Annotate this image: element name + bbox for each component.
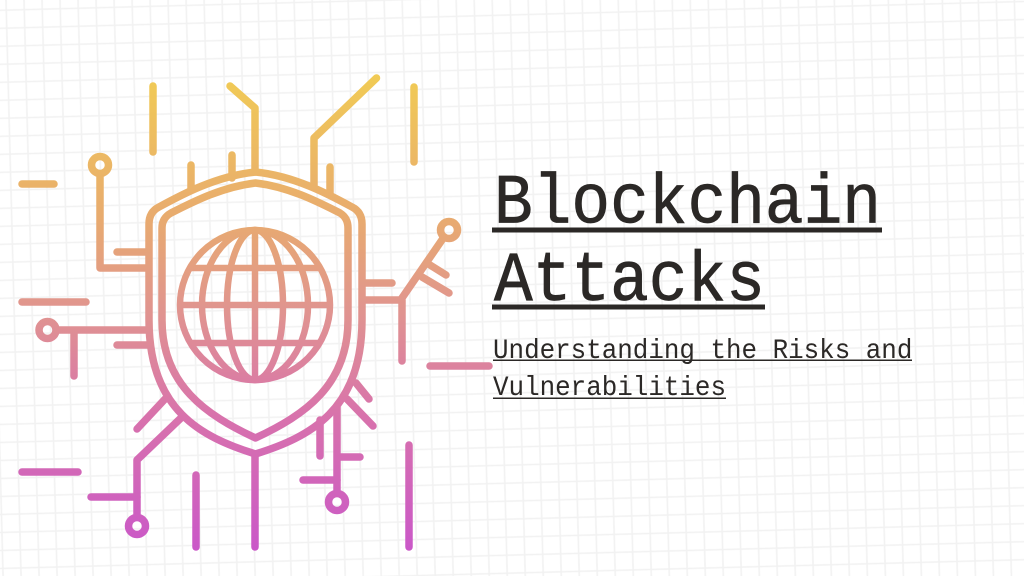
title line 1: Blockchain xyxy=(494,165,881,245)
shield inner outline xyxy=(162,183,348,438)
circuit lines: lower left with node xyxy=(22,399,255,547)
subtitle line 2: Vulnerabilities xyxy=(493,373,726,404)
circuit lines: right with node xyxy=(365,222,489,366)
circuit lines: top xyxy=(153,78,414,193)
circuit lines: lower right with node xyxy=(303,383,409,547)
title xyxy=(492,165,882,322)
shield outer outline xyxy=(149,172,362,454)
icon: globe xyxy=(180,230,330,380)
title line 2: Attacks xyxy=(494,243,765,322)
illustration: shield with globe and circuit lines xyxy=(22,78,489,547)
subtitle line 1: Understanding the Risks and xyxy=(493,336,912,367)
subtitle xyxy=(493,336,912,404)
circuit lines: upper left with node xyxy=(22,156,148,302)
circuit lines: middle left with node xyxy=(39,322,148,376)
